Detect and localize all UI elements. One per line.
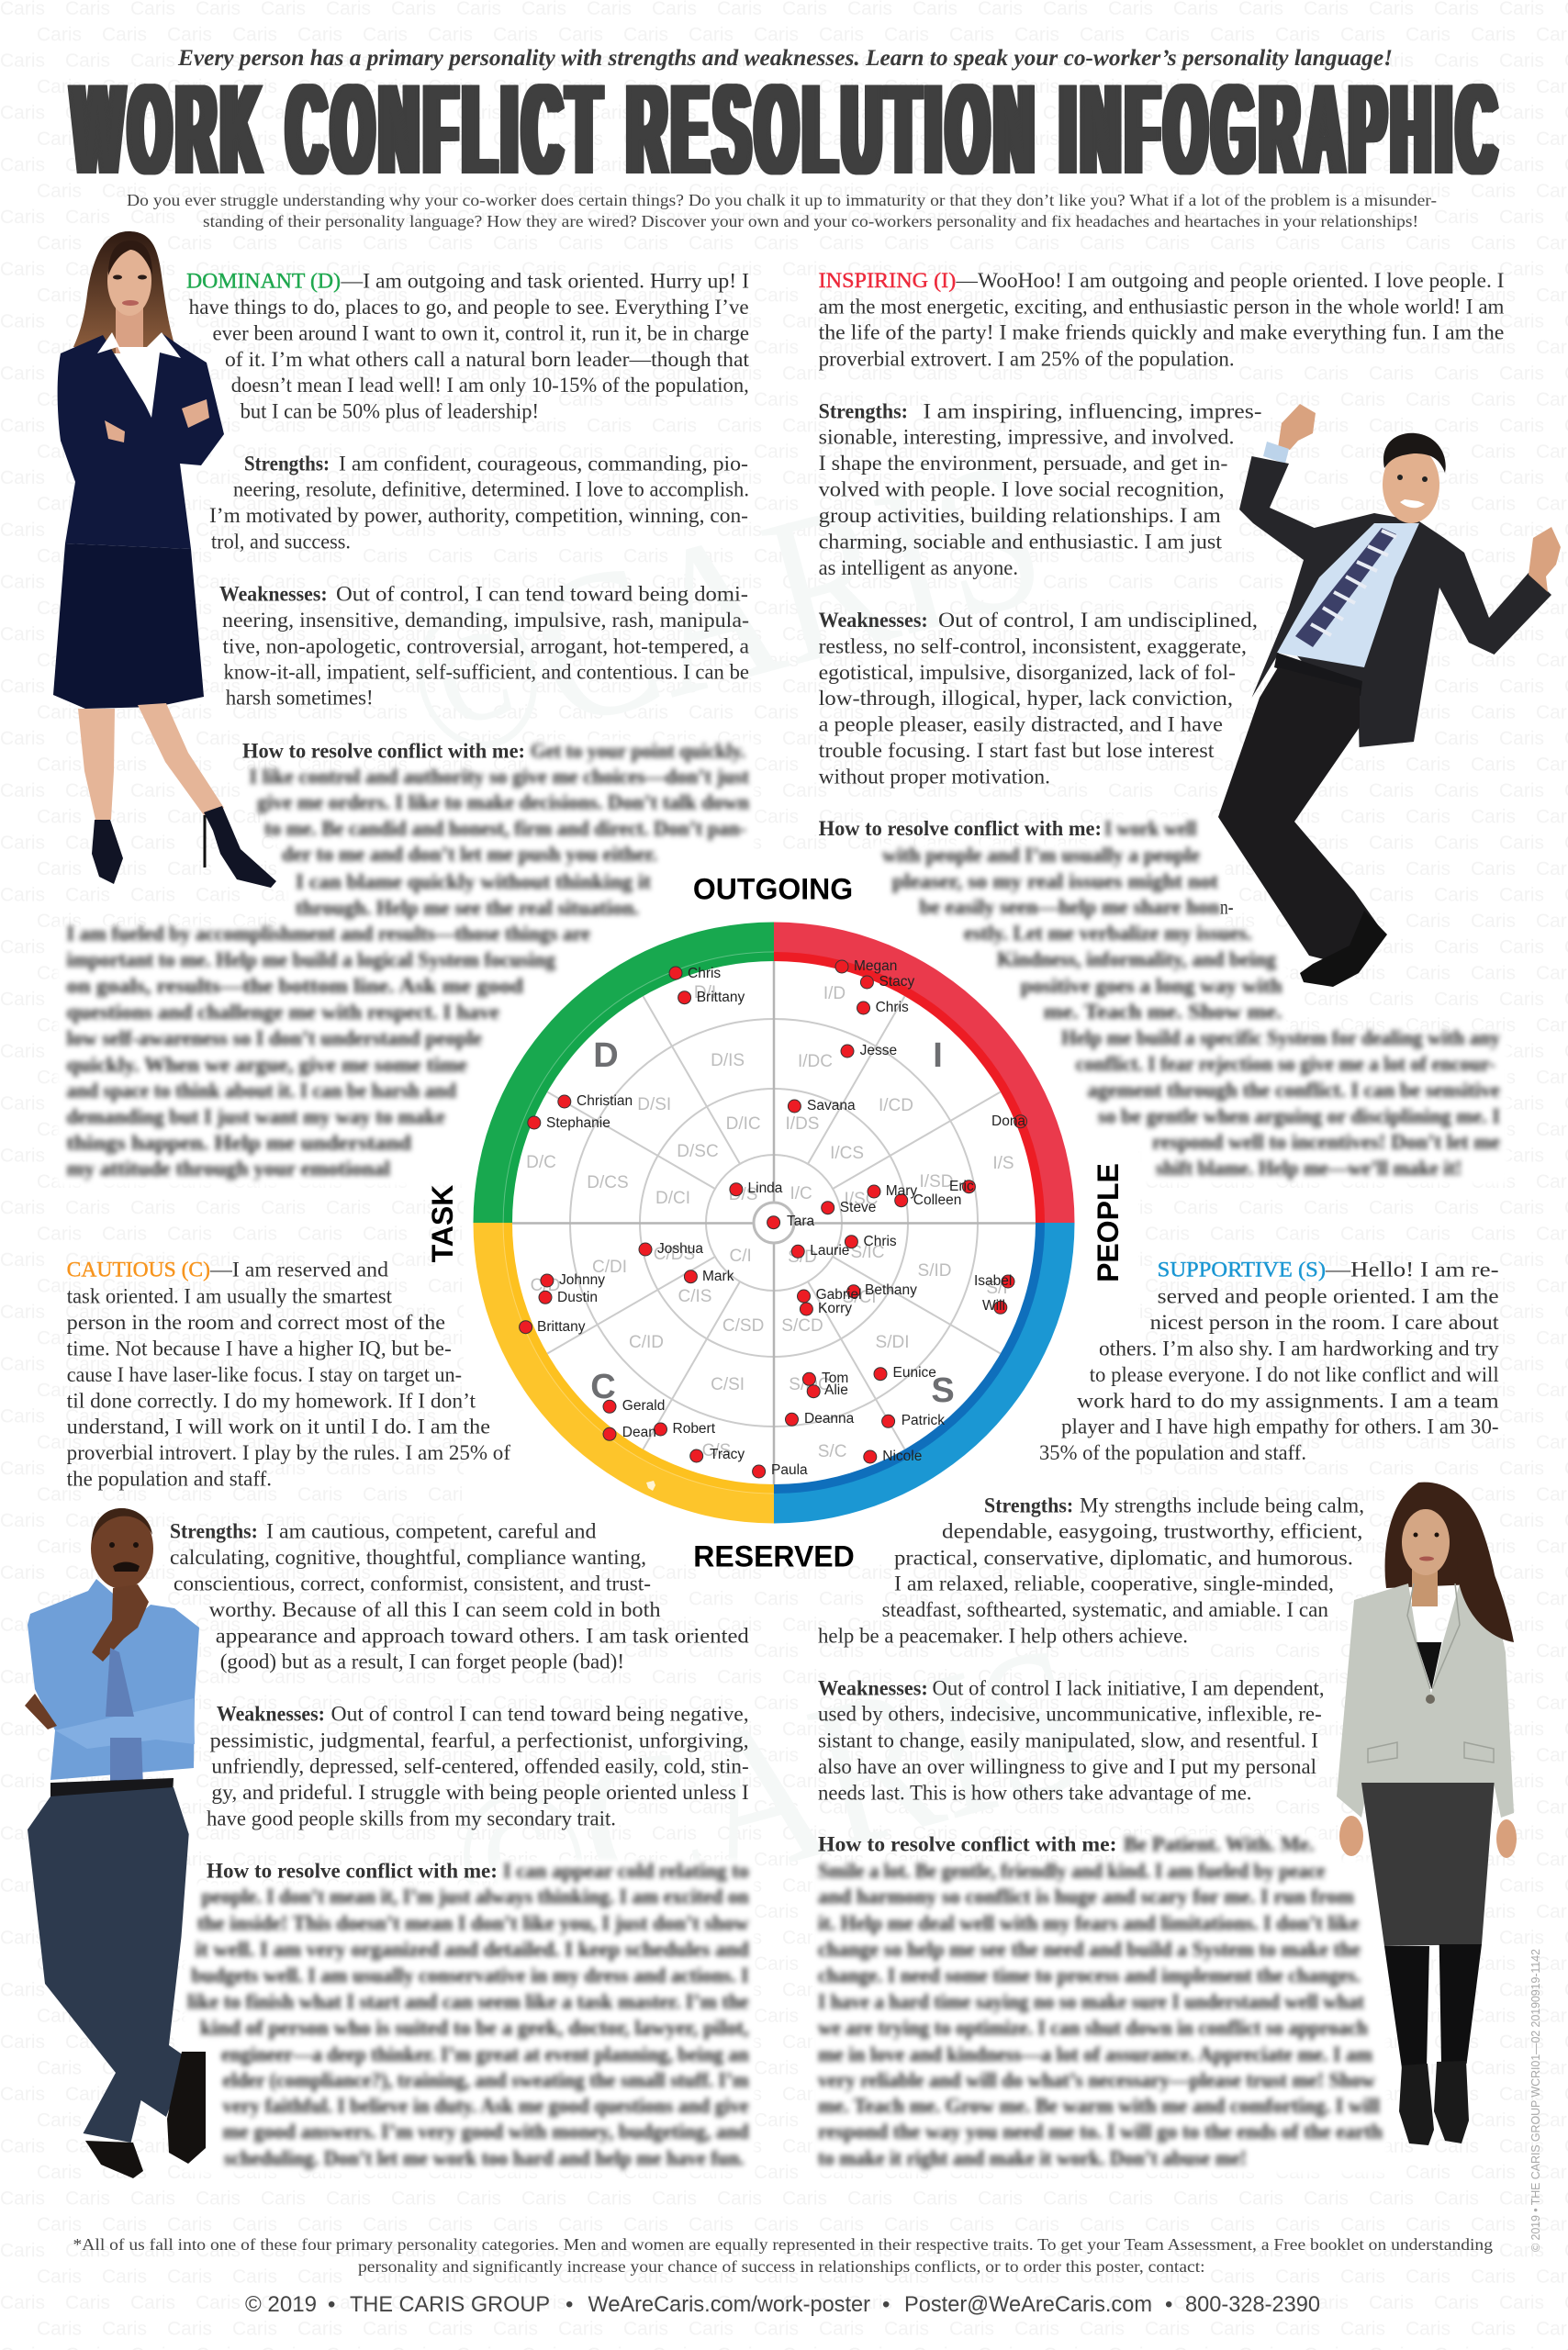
contact line: • [1165, 2292, 1172, 2317]
panel: dominant text: Strengths: [244, 452, 330, 476]
axis label: people: PEOPLE [1092, 1163, 1125, 1282]
heading: inspiring: INSPIRING (I) [819, 269, 956, 292]
blend labels: C/S [702, 1441, 731, 1460]
panel: inspiring text: charming, sociable and enthusiastic. I am just [819, 531, 1223, 553]
plotted people names: Deanna [804, 1411, 855, 1427]
blurred conflict text: inspiring: Kindness, informality, and being [997, 947, 1276, 971]
blurred conflict text: cautious: engineer—a deep thinker. I’m great at event planning, being an [221, 2042, 749, 2065]
blurred conflict text: supportive: Be Patient. With. Me. [1124, 1832, 1315, 1856]
panel: inspiring text: volved with people. I love social recognition, [819, 477, 1225, 501]
plotted people names: Gerald [622, 1398, 665, 1414]
panel: supportive text: served and people oriented. I am the [1158, 1285, 1499, 1307]
speck on yellow ring [646, 1481, 655, 1491]
panel: supportive text: others. I’m also shy. I am hardworking and try [1099, 1337, 1499, 1360]
blurred conflict text: inspiring: positive goes a long way with [1021, 975, 1282, 997]
plotted people names: Dona [991, 1113, 1025, 1129]
plotted people names: Tara [787, 1214, 815, 1229]
blurred conflict text: supportive: change. I need some time to process and implement the changes. [818, 1964, 1361, 1986]
plotted people names: Joshua [657, 1241, 703, 1257]
blurred conflict text: supportive: me in love and kindness—a lot of assurance. Appreciate me. I am [818, 2042, 1372, 2065]
panel: cautious text: time. Not because I have a higher IQ, but be- [67, 1337, 452, 1360]
blurred conflict text: supportive: respond the way you need me to. I will go to the ends of the earth [818, 2121, 1383, 2143]
panel: cautious text: Out of control I can tend toward being negative, [330, 1702, 749, 1726]
panel: cautious text: proverbial introvert. I play by the rules. I am 25% of [67, 1441, 510, 1464]
blend labels: D/CI [655, 1189, 690, 1208]
plotted people names: Robert [672, 1421, 716, 1437]
contact line: WeAreCaris.com/work-poster [588, 2292, 870, 2317]
panel: cautious text: —I am reserved and [209, 1258, 389, 1281]
panel: cautious text: I am cautious, competent, careful and [266, 1519, 597, 1542]
plotted people names: Tom [822, 1371, 848, 1386]
blurred conflict text: supportive: we are trying to optimize. I can shut down in conflict so approach [818, 2016, 1368, 2040]
blurred conflict text: supportive [812, 1832, 1388, 2174]
panel: supportive text: Out of control I lack initiative, I am dependent, [933, 1676, 1324, 1699]
axis label: task: TASK [426, 1185, 459, 1262]
title: WORK CONFLICT RESOLUTION INFOGRAPHIC [73, 57, 1502, 201]
panel: inspiring text: group activities, building relationships. I am [819, 504, 1221, 527]
panel: cautious text: task oriented. I am usually the smartest [67, 1285, 393, 1307]
panel: dominant text: trol, and success. [211, 531, 351, 553]
ring: inspiring red [774, 922, 1074, 1223]
quadrant letters: S [931, 1371, 955, 1410]
plotted people names: Colleen [913, 1192, 961, 1208]
blend labels: D/S [729, 1185, 757, 1204]
ring: dominant green [474, 922, 774, 1223]
heading: dominant: DOMINANT (D) [186, 270, 341, 292]
panel: supportive text: Weaknesses: [818, 1676, 928, 1699]
panel: dominant text [186, 270, 750, 762]
panel: dominant text: —I am outgoing and task oriented. Hurry up! I [340, 270, 749, 292]
panel: supportive text: practical, conservative, diplomatic, and humorous. [894, 1546, 1353, 1570]
panel: dominant text: have things to do, places to go, and people to see. Everything I’ve [189, 296, 749, 319]
blurred conflict text: inspiring: agement through the conflict. I can be sensitive [1087, 1079, 1500, 1102]
blurred conflict text: supportive: it. Help me deal well with my fears and limitations. I don’t like [818, 1911, 1360, 1935]
panel: dominant text: harsh sometimes! [226, 687, 374, 709]
blurred conflict text: supportive: Smile a lot. Be gentle, friendly and kind. I am fueled by peace [818, 1859, 1326, 1882]
plotted people names: Will [982, 1298, 1005, 1314]
blend labels: D/I [694, 983, 716, 1002]
plotted people names: Stephanie [546, 1115, 610, 1131]
blend labels: C/DS [654, 1245, 695, 1264]
photo: supportive woman [1337, 1483, 1517, 2145]
white clearing behind wheel [464, 854, 1138, 1561]
intro paragraph: Do you ever struggle understanding why your co-worker does certain things? Do you chalk it up to immaturity or that they don’t like you? What if a lot of the problem is a misunder- [127, 191, 1437, 209]
panel: cautious text: worthy. Because of all this I can seem cold in both [209, 1598, 661, 1621]
plotted people names: Brittany [697, 990, 745, 1005]
plotted people names: Dustin [557, 1290, 598, 1305]
blend labels: C/SD [722, 1316, 764, 1336]
panel: dominant text: I am confident, courageous, commanding, pio- [339, 452, 748, 476]
plotted people names: Patrick [902, 1413, 945, 1428]
blend labels: S/ID [918, 1261, 951, 1281]
blend labels: S/D [788, 1248, 817, 1267]
plotted people names: Savana [807, 1098, 856, 1113]
blurred conflict text: supportive: to make it right and make it work. Don’t abuse me! [818, 2146, 1247, 2170]
plotted people names: Gabriel [816, 1287, 862, 1303]
blurred conflict text: dominant: I am fueled by accomplishment and results—those things are [66, 922, 590, 946]
panel: inspiring text: Strengths: [819, 399, 908, 422]
tagline: Every person has a primary personality with strengths and weaknesses. Learn to speak your co-worker’s personality language! [177, 46, 1393, 71]
panel: dominant text: neering, resolute, definitive, determined. I love to accomplish. [233, 477, 749, 501]
panel: supportive text: also have an over willingness to give and I put my personal [818, 1755, 1316, 1778]
panel: dominant text: doesn’t mean I lead well! I am only 10-15% of the population, [231, 374, 749, 397]
big watermark lower: ©CARIS [429, 1598, 1110, 1990]
blend labels: D/IC [726, 1114, 761, 1134]
blurred conflict text: supportive: very reliable and will do what’s necessary—please trust me! Show [818, 2068, 1375, 2091]
panel: supportive text: 35% of the population and staff. [1039, 1441, 1306, 1464]
blurred conflict text: dominant: to me. Be candid and honest, firm and direct. Don’t pan- [264, 817, 746, 840]
panel: supportive text: nicest person in the room. I care about [1150, 1311, 1499, 1334]
blurred conflict text: dominant: questions and challenge me with respect. I have [66, 1001, 499, 1024]
panel: inspiring text: I shape the environment, persuade, and get in- [819, 452, 1227, 475]
panel: cautious text: Strengths: [170, 1519, 258, 1542]
panel: inspiring text: low-through, illogical, hyper, lack conviction, [819, 687, 1233, 710]
panel: cautious text: the population and staff. [67, 1467, 272, 1491]
blurred conflict text: cautious: scheduling. Don’t let me work too hard and help me have fun. [224, 2146, 745, 2170]
blurred conflict text: cautious: me good answers. I’m very good with money, budgeting, and [222, 2121, 749, 2143]
plotted people names: Steve [840, 1200, 876, 1215]
panel: inspiring text: I am inspiring, influencing, impres- [924, 399, 1261, 422]
blend labels: S/DC [789, 1375, 831, 1394]
personality wheel [474, 922, 1074, 1524]
footnote: *All of us fall into one of these four primary personality categories. Men and women are equally represented in their respective traits. To get your Team Assessment, a Free booklet on understanding [73, 2235, 1493, 2254]
quadrant letters: C [590, 1368, 616, 1406]
blurred conflict text: dominant: give me orders. I like to make decisions. Don’t talk down [257, 791, 749, 813]
panel: inspiring text: without proper motivation. [819, 766, 1050, 788]
panel: dominant text: Weaknesses: [219, 582, 328, 606]
blurred conflict text: dominant: der to me and don’t let me push you either. [282, 843, 657, 866]
panel: cautious text: conscientious, correct, conformist, consistent, and trust- [174, 1572, 651, 1595]
panel: cautious text: appearance and approach toward others. I am task oriented [216, 1625, 749, 1647]
panel: supportive text: needs last. This is how others take advantage of me. [818, 1781, 1252, 1805]
panel: supportive text: My strengths include being calm, [1080, 1494, 1364, 1516]
blurred conflict text: dominant: on goals, results—the bottom line. Ask me good [66, 975, 523, 997]
blurred conflict text: inspiring: conflict. I fear rejection so give me a lot of encour- [1076, 1052, 1495, 1076]
blend labels: I/DC [798, 1052, 833, 1071]
contact line: Poster@WeAreCaris.com [904, 2292, 1152, 2317]
panel: inspiring text: Weaknesses: [819, 609, 928, 632]
panel: supportive text: I am relaxed, reliable, cooperative, single-minded, [894, 1572, 1334, 1595]
axis label: reserved: RESERVED [693, 1540, 855, 1573]
panel: cautious text: How to resolve conflict with me: [207, 1859, 498, 1882]
blend labels: I/SC [845, 1190, 878, 1209]
plotted people names: Megan [854, 958, 897, 974]
blurred conflict text: dominant: and space to think about it. I can be harsh and [66, 1080, 456, 1102]
blurred conflict text: cautious: people. I don’t mean it, I’m just always thinking. I am excited on [201, 1886, 749, 1908]
blurred conflict text: inspiring: pleaser, so my real issues might not [892, 870, 1218, 892]
panel: cautious text: cause I have laser-like focus. I stay on target un- [67, 1363, 462, 1386]
panel: inspiring text: sionable, interesting, impressive, and involved. [819, 426, 1234, 448]
blurred conflict text: dominant: important to me. Help me build a logical System focusing [66, 948, 555, 971]
panel: supportive text: —Hello! I am re- [1325, 1258, 1499, 1281]
panel: cautious text: (good) but as a result, I can forget people (bad)! [220, 1651, 624, 1673]
blurred conflict text: dominant: quickly. When we argue, give me some time [66, 1054, 467, 1076]
blurred conflict text: inspiring: be easily seen—help me share hon [920, 896, 1220, 918]
big watermark upper: ©CARIS [383, 414, 1064, 806]
blurred conflict text: cautious: like to finish what I start and can seem like a task master. I’m the [187, 1990, 749, 2013]
blurred conflict text: dominant: low self-awareness so I don’t understand people [66, 1026, 482, 1050]
photo: dominant woman [53, 231, 276, 888]
photo: cautious man [25, 1508, 206, 2178]
panel: supportive text: player and I have high empathy for others. I am 30- [1061, 1416, 1499, 1438]
panel: inspiring text: How to resolve conflict with me: [819, 817, 1102, 840]
plotted people names: Linda [747, 1181, 783, 1196]
heading: supportive: SUPPORTIVE (S) [1158, 1258, 1326, 1281]
plotted people names: Laurie [810, 1243, 849, 1259]
intro paragraph [127, 191, 1437, 230]
plotted people names: Alie [824, 1382, 848, 1398]
panel: inspiring text: proverbial extrovert. I am 25% of the population. [819, 347, 1235, 371]
panel: inspiring text: n- [1220, 896, 1234, 918]
plotted people names: Isabel [974, 1273, 1012, 1289]
panel: inspiring text: restless, no self-control, inconsistent, exaggerate, [819, 635, 1247, 657]
plotted people names [537, 958, 1025, 1478]
plotted people names: Mark [702, 1269, 734, 1284]
panel: cautious text [67, 1258, 749, 1882]
blend labels: D/C [526, 1153, 556, 1172]
blurred conflict text: supportive: I have a hard time saying no so make sure I understand well what [818, 1990, 1364, 2013]
plotted people names: Nicole [882, 1449, 922, 1464]
plotted people names: Dean [622, 1425, 656, 1440]
panel: dominant text: I’m motivated by power, authority, competition, winning, con- [209, 504, 748, 527]
photo: inspiring man [1218, 404, 1561, 987]
plotted people names: Bethany [865, 1282, 917, 1298]
panel: dominant text: but I can be 50% plus of leadership! [241, 399, 539, 422]
blurred conflict text: cautious: budgets well. I am usually conservative in my dress and actions. I [191, 1964, 749, 1986]
intro paragraph: standing of their personality language? How they are wired? Discover your own and your co-workers personality and fix headaches and heartaches in your relationships! [203, 212, 1418, 230]
panel: dominant text: How to resolve conflict with me: [242, 740, 525, 762]
contact line: • [328, 2292, 335, 2317]
plotted people names: Mary [886, 1183, 917, 1199]
blend labels: S/IC [851, 1243, 884, 1262]
blend labels: I/DS [786, 1114, 819, 1134]
blend labels: C/D [531, 1276, 560, 1295]
plotted people names: Chris [688, 966, 721, 981]
quadrant letters: D [593, 1036, 619, 1075]
blurred conflict text: dominant: Get to your point quickly. [531, 740, 745, 762]
panel: cautious text: unfriendly, depressed, self-centered, offended easily, cold, stin- [211, 1755, 749, 1777]
blend labels: S/DI [876, 1333, 909, 1352]
quadrant letters [590, 1036, 955, 1410]
blurred conflict text: inspiring: respond well to incentives! Don’t let me [1152, 1131, 1500, 1153]
blurred conflict text: inspiring: so be gentle when arguing or disciplining me. I [1098, 1105, 1500, 1127]
blurred conflict text: cautious [184, 1859, 755, 2174]
panel: supportive text: help be a peacemaker. I help others achieve. [818, 1625, 1188, 1647]
plotted people names: Christian [577, 1093, 633, 1109]
panel: cautious text: understand, I will work on it until I do. I am the [67, 1416, 490, 1438]
blend labels: C/IS [678, 1287, 711, 1306]
panel: inspiring text: am the most energetic, exciting, and enthusiastic person in the whole world! I am [819, 296, 1505, 318]
panel: inspiring text: as intelligent as anyone. [819, 556, 1018, 579]
panel: dominant text: Out of control, I can tend toward being domi- [336, 582, 748, 606]
blurred conflict text: inspiring: Help me build a specific System for dealing with any [1061, 1026, 1500, 1049]
panel: inspiring text: trouble focusing. I start fast but lose interest [819, 739, 1215, 762]
blurred conflict text: inspiring: with people and I’m usually a people [882, 844, 1200, 867]
blurred conflict text: inspiring: estly. Let me verbalize my issues. [964, 922, 1252, 945]
plotted people names: Tracy [710, 1447, 745, 1462]
blurred conflict text: dominant [57, 740, 755, 1186]
panel: supportive text: used by others, indecisive, uncommunicative, inflexible, re- [818, 1702, 1322, 1726]
panel: inspiring text: egotistical, impulsive, disorganized, lack of fol- [819, 661, 1236, 684]
blurred conflict text: dominant: I can blame quickly without thinking it [296, 870, 651, 893]
panel: supportive text [818, 1258, 1499, 1856]
panel: inspiring text: —WooHoo! I am outgoing and people oriented. I love people. I [955, 269, 1504, 292]
panel: cautious text: person in the room and correct most of the [67, 1311, 445, 1334]
heading: cautious: CAUTIOUS (C) [67, 1258, 210, 1281]
panel: dominant text: know-it-all, impatient, self-sufficient, and contentious. I can be [224, 661, 749, 683]
ring: cautious yellow [474, 1223, 774, 1524]
panel: dominant text: neering, insensitive, demanding, impulsive, rash, manipula- [222, 609, 749, 632]
panel: inspiring text [819, 269, 1505, 918]
blurred conflict text: cautious: very faithful. I believe in duty. Ask me good questions and give [222, 2095, 749, 2117]
plotted people names: Brittany [537, 1319, 586, 1335]
blend labels: I/C [790, 1184, 812, 1203]
blend labels: I/S [992, 1154, 1014, 1173]
contact line: THE CARIS GROUP [350, 2292, 550, 2317]
blend labels: I/D [823, 984, 846, 1003]
plotted people names: Eric [949, 1179, 974, 1194]
panel: inspiring text: Out of control, I am undisciplined, [938, 609, 1258, 632]
blurred conflict text: dominant: my attitude through your emotional [66, 1157, 390, 1181]
plotted people names: Eunice [892, 1365, 936, 1381]
plotted people names: Korry [818, 1301, 852, 1316]
blurred conflict text: cautious: the inside! This doesn’t mean I don’t like you, I just don’t show [197, 1911, 749, 1935]
blend labels: I/CS [830, 1144, 864, 1163]
blend labels: S/I [986, 1279, 1008, 1298]
vertical print code: © 2019 • THE CARIS GROUP WCRI01—02 20190919-1142 [1529, 1949, 1542, 2252]
panel: cautious text: til done correctly. I do my homework. If I don’t [67, 1390, 476, 1412]
ring: supportive blue [774, 1223, 1074, 1524]
contact line: • [882, 2292, 890, 2317]
blend labels: D/SC [677, 1142, 719, 1161]
panel: supportive text: dependable, easygoing, trustworthy, efficient, [942, 1519, 1362, 1542]
blurred conflict text: dominant: through. Help me see the real situation. [296, 896, 639, 920]
blend labels: I/CD [879, 1096, 913, 1115]
panel: cautious text: Weaknesses: [217, 1702, 325, 1726]
plotted people names: Paula [771, 1462, 808, 1478]
panel: supportive text: Strengths: [984, 1494, 1073, 1516]
blend labels: S/C [818, 1442, 846, 1461]
panel: supportive text: to please everyone. I do not like conflict and will [1090, 1363, 1499, 1386]
contact line [245, 2292, 1320, 2317]
panel: supportive text: work hard to do my assignments. I am a team [1077, 1390, 1499, 1412]
blend labels: D/SI [637, 1095, 671, 1114]
plotted people names: Jesse [860, 1043, 897, 1058]
panel: supportive text: steadfast, softhearted, systematic, and amiable. I can [882, 1598, 1329, 1621]
blend labels: C/DI [592, 1258, 627, 1277]
blurred conflict text: cautious: kind of person who is suited to be a geek, doctor, lawyer, pilot, [200, 2016, 749, 2040]
panel: cautious text: pessimistic, judgmental, fearful, a perfectionist, unforgiving, [210, 1729, 749, 1751]
footnote [73, 2235, 1493, 2276]
blend labels: C/ID [629, 1333, 664, 1352]
footnote: personality and significantly increase your chance of success in relationships conflicts, or to order this poster, contact: [358, 2257, 1205, 2276]
blurred conflict text: dominant: demanding but I just want my way to make [66, 1105, 445, 1128]
panel: dominant text: ever been around I want to own it, control it, run it, be in charge [213, 321, 749, 345]
panel: cautious text: have good people skills from my secondary trait. [207, 1807, 616, 1830]
panel: inspiring text: the life of the party! I make friends quickly and make everything fun. I am the [819, 321, 1504, 343]
blend labels [526, 983, 1014, 1461]
plotted people dots [520, 960, 1027, 1478]
panel: cautious text: gy, and prideful. I struggle with being people oriented unless I [211, 1781, 749, 1804]
blend labels: C/I [730, 1247, 752, 1266]
panel: inspiring text: a people pleaser, easily distracted, and I have [819, 712, 1223, 736]
contact line: 800-328-2390 [1185, 2292, 1320, 2317]
blurred conflict text: inspiring: I work well [1104, 817, 1197, 840]
blurred conflict text: cautious: I can appear cold relating to [503, 1859, 749, 1882]
blend labels: S/CI [843, 1288, 876, 1307]
blend labels: D/CS [587, 1173, 629, 1192]
blurred conflict text: inspiring [872, 815, 1507, 1184]
panel: supportive text: sistant to change, easily manipulated, slow, and resentful. I [818, 1729, 1318, 1751]
plotted people names: Stacy [879, 974, 915, 990]
panel: dominant text: tive, non-apologetic, controversial, arrogant, hot-tempered, a [222, 635, 749, 657]
panel: dominant text: of it. I’m what others call a natural born leader—though that [225, 348, 750, 371]
blurred conflict text: supportive: me. Teach me. Grow me. Be warm with me and comforting. I will [818, 2095, 1380, 2117]
panel: supportive text: How to resolve conflict with me: [818, 1832, 1116, 1856]
quadrant letters: I [933, 1036, 943, 1075]
blurred conflict text: supportive: and harmony so conflict is huge and scary for me. I run from [818, 1886, 1354, 1908]
blend labels: C/SI [711, 1375, 745, 1394]
blurred conflict text: supportive: change so help me see the need and build a System to make the [818, 1938, 1361, 1961]
blend labels: D/IS [711, 1051, 745, 1070]
blurred conflict text: cautious: it well. I am very organized and detailed. I keep schedules and [196, 1938, 749, 1961]
plotted people names: Chris [876, 1000, 909, 1015]
blurred conflict text: inspiring: shift blame. Help me—we’ll make it! [1156, 1157, 1462, 1180]
plotted people names: Chris [863, 1234, 897, 1249]
blurred conflict text: dominant: things happen. Help me understand [66, 1131, 411, 1155]
blend labels: I/SD [920, 1172, 953, 1192]
contact line: • [566, 2292, 573, 2317]
blend labels: S/CD [781, 1316, 823, 1336]
plotted people names: Johnny [559, 1272, 605, 1288]
contact line: © 2019 [245, 2292, 317, 2317]
panel: cautious text: calculating, cognitive, thoughtful, compliance wanting, [170, 1546, 646, 1569]
blurred conflict text: inspiring: me. Teach me. Show me. [1044, 1001, 1282, 1023]
axis label: outgoing: OUTGOING [693, 872, 853, 905]
blurred conflict text: dominant: I like control and authority so give me choices—don’t just [250, 766, 749, 788]
blurred conflict text: cautious: elder (compliance?), training, and sweating the small stuff. I’m [222, 2068, 749, 2091]
